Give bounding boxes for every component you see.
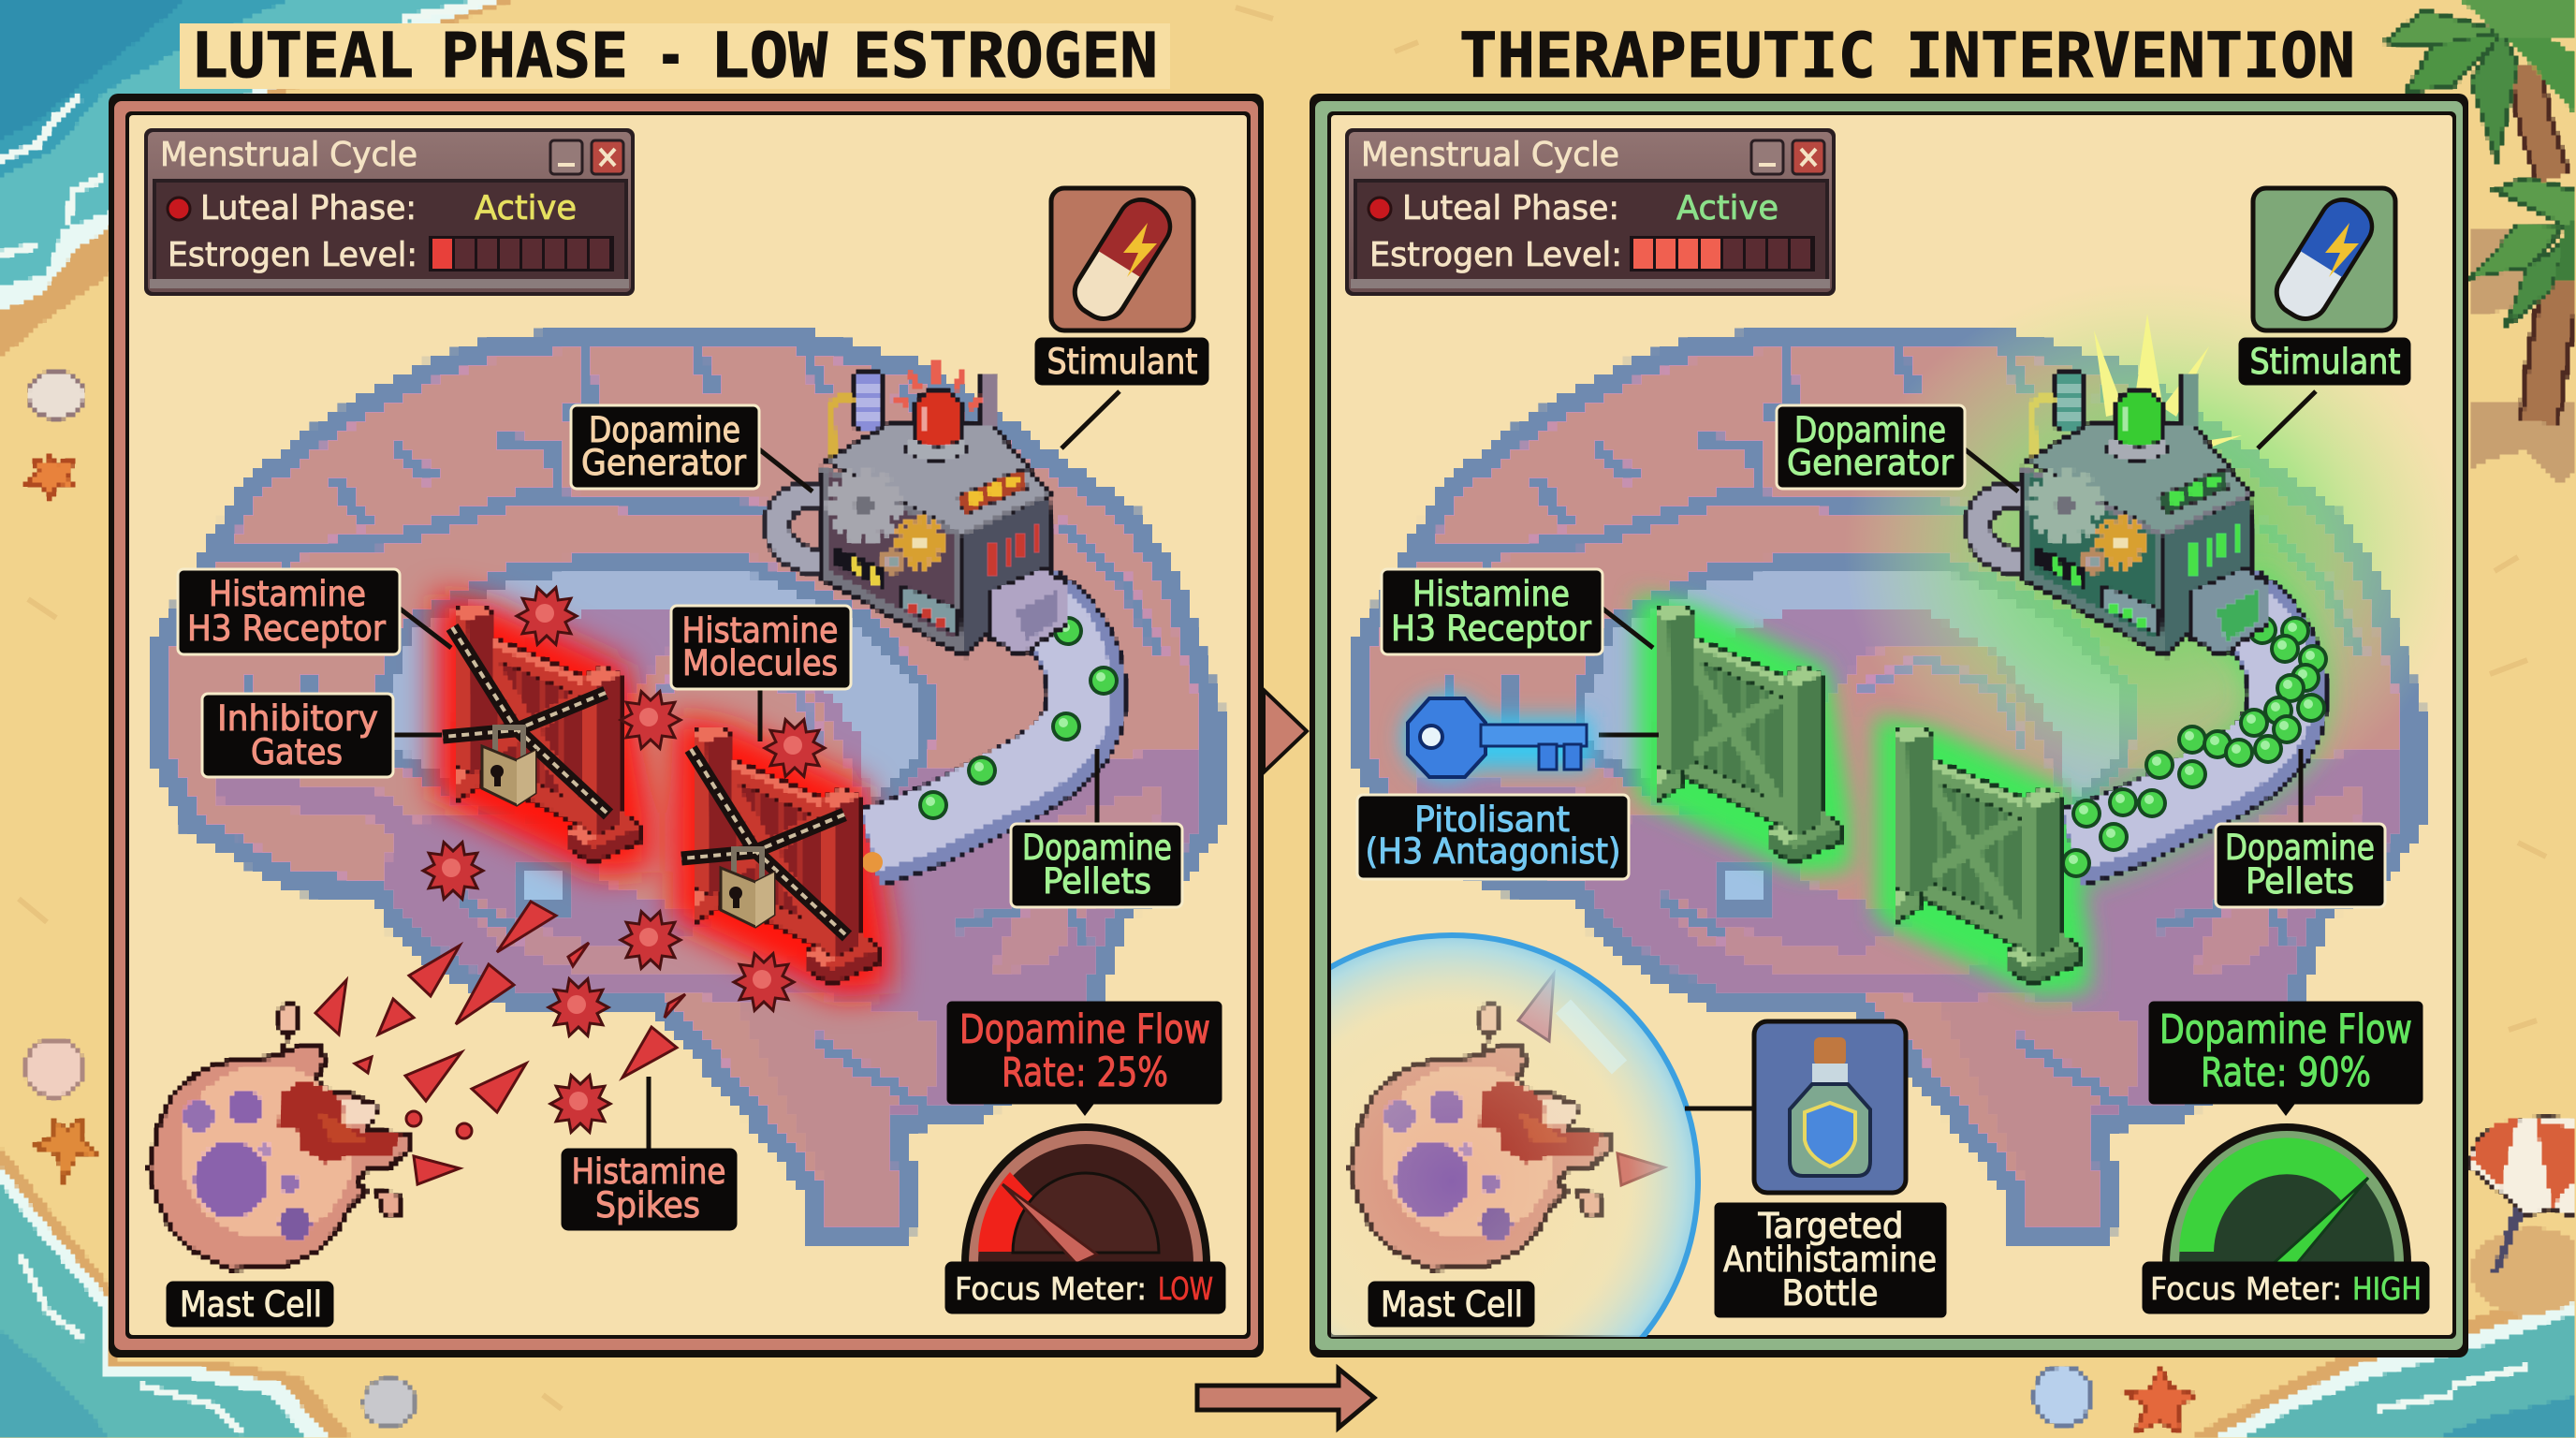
starfish xyxy=(34,1119,98,1180)
label: targeted antihistamine bottle: Bottle xyxy=(1782,1273,1878,1313)
label: histamine molecules: Histamine xyxy=(681,610,839,651)
title left: - xyxy=(656,20,685,92)
water: top left xyxy=(0,0,515,358)
menstrual cycle window xyxy=(1345,128,1836,296)
protective shield bubble xyxy=(1331,932,1701,1337)
seashell xyxy=(28,373,84,418)
title right: INTERVENTION xyxy=(1906,20,2355,92)
dopamine flow callout: Rate: 25% xyxy=(1002,1049,1168,1096)
icon: pitolisant key xyxy=(1403,695,1591,781)
mast cell xyxy=(1351,1005,1610,1269)
menstrual cycle window: Estrogen Level: xyxy=(168,236,417,274)
menstrual cycle window: Luteal Phase: xyxy=(200,189,417,227)
title left xyxy=(180,20,1170,92)
focus meter label: Focus Meter: xyxy=(955,1270,1147,1307)
palm tree xyxy=(2385,0,2576,484)
label: dopamine generator xyxy=(571,405,759,489)
water: bottom right xyxy=(2190,1283,2576,1438)
gate glow xyxy=(1641,599,2288,992)
label: histamine h3 receptor: Histamine xyxy=(1412,574,1570,614)
icon: stimulant capsule xyxy=(1051,188,1193,330)
dopamine flow callout: Dopamine Flow xyxy=(2159,1006,2412,1053)
icon: stimulant capsule xyxy=(2253,188,2395,330)
label: histamine h3 receptor: H3 Receptor xyxy=(187,609,387,649)
dopamine generator xyxy=(777,360,1067,655)
label: histamine h3 receptor: H3 Receptor xyxy=(1391,609,1592,649)
connector lines xyxy=(393,391,1120,1150)
menstrual cycle window: Menstrual Cycle xyxy=(160,136,417,174)
focus meter label xyxy=(2144,1263,2428,1313)
title right xyxy=(1459,20,2355,92)
open gate 2 xyxy=(1877,724,2079,984)
panel: luteal phase xyxy=(109,94,1264,1357)
dopamine pellets xyxy=(2061,604,2328,878)
rock xyxy=(364,1379,415,1426)
label: dopamine pellets xyxy=(2216,824,2385,907)
dopamine pellets xyxy=(862,616,1119,873)
label: dopamine generator xyxy=(1777,405,1965,489)
label: stimulant: Stimulant xyxy=(2250,342,2400,382)
arrow: panel connector xyxy=(1264,690,1307,772)
label: histamine spikes xyxy=(563,1150,736,1229)
dopamine generator xyxy=(1979,373,2268,655)
dopamine track xyxy=(2071,604,2288,847)
title right: THERAPEUTIC xyxy=(1459,20,1876,92)
label: pitolisant: Pitolisant xyxy=(1414,800,1570,840)
focus meter label: HIGH xyxy=(2352,1270,2422,1307)
label: dopamine generator: Dopamine xyxy=(1794,410,1946,450)
arrow: bottom progress xyxy=(1197,1369,1374,1428)
label: histamine h3 receptor xyxy=(178,569,400,654)
residual spikes xyxy=(1518,974,1664,1185)
title left: LOW xyxy=(710,20,827,92)
label: dopamine generator: Generator xyxy=(1787,443,1954,483)
starfish xyxy=(26,455,75,498)
starfish xyxy=(2127,1369,2194,1432)
label: pitolisant: (H3 Antagonist) xyxy=(1365,831,1621,872)
brain xyxy=(1360,338,2413,1233)
seashell xyxy=(26,1040,82,1096)
label: histamine molecules xyxy=(671,606,851,689)
dopamine flow callout: Rate: 90% xyxy=(2201,1049,2371,1096)
generator energy glow xyxy=(1863,307,2432,796)
title left: PHASE xyxy=(441,20,628,92)
label: inhibitory gates: Inhibitory xyxy=(217,698,378,739)
label: dopamine pellets: Dopamine xyxy=(2225,828,2375,868)
focus meter label: LOW xyxy=(1158,1270,1213,1307)
connector lines xyxy=(1599,391,2316,1108)
focus meter label: Focus Meter: xyxy=(2150,1270,2342,1307)
dopamine track xyxy=(871,604,1087,847)
histamine spikes xyxy=(315,902,685,1184)
label: histamine h3 receptor: Histamine xyxy=(209,574,366,614)
dopamine flow callout xyxy=(948,1003,1221,1116)
label: pitolisant xyxy=(1357,795,1629,879)
focus gauge xyxy=(961,1123,1210,1264)
menstrual cycle window xyxy=(144,128,635,296)
panel: therapeutic intervention xyxy=(1310,94,2468,1357)
label: histamine spikes: Histamine xyxy=(571,1152,726,1192)
inflammation glow xyxy=(440,599,885,992)
beach umbrella xyxy=(2468,1118,2576,1314)
open gate 1 xyxy=(1638,602,1840,862)
menstrual cycle window: Luteal Phase: xyxy=(1402,189,1619,227)
label: dopamine pellets: Pellets xyxy=(1043,861,1151,902)
label: dopamine generator: Dopamine xyxy=(589,410,740,450)
label: mast cell: Mast Cell xyxy=(180,1284,322,1325)
label: mast cell: Mast Cell xyxy=(1381,1284,1523,1325)
menstrual cycle window: Active xyxy=(475,189,577,227)
panel frame xyxy=(1310,94,2468,1357)
label: dopamine pellets xyxy=(1011,824,1182,907)
label: histamine h3 receptor xyxy=(1382,569,1603,654)
focus gauge xyxy=(2162,1123,2411,1266)
water: bottom left xyxy=(0,1147,351,1438)
label: histamine spikes: Spikes xyxy=(595,1185,700,1225)
title left: ESTROGEN xyxy=(853,20,1158,92)
menstrual cycle window: Menstrual Cycle xyxy=(1361,136,1619,174)
label: stimulant: Stimulant xyxy=(1046,342,1198,382)
locked gate 2 xyxy=(676,724,878,984)
menstrual cycle window: Active xyxy=(1676,189,1778,227)
mast cell xyxy=(150,1005,409,1269)
panel frame xyxy=(109,94,1264,1357)
seashell xyxy=(2035,1367,2091,1425)
label: dopamine pellets: Pellets xyxy=(2246,861,2354,902)
label: targeted antihistamine bottle: Targeted xyxy=(1758,1206,1904,1246)
label: histamine molecules: Molecules xyxy=(682,643,838,683)
label: targeted antihistamine bottle xyxy=(1716,1204,1945,1316)
dopamine flow callout xyxy=(2150,1003,2422,1116)
label: dopamine pellets: Dopamine xyxy=(1022,828,1172,868)
label: dopamine generator: Generator xyxy=(581,443,747,483)
icon: antihistamine bottle xyxy=(1754,1021,1906,1193)
label: inhibitory gates xyxy=(202,694,393,777)
histamine molecules xyxy=(423,588,825,1132)
focus meter label xyxy=(946,1263,1224,1313)
menstrual cycle window: Estrogen Level: xyxy=(1369,236,1622,274)
brain xyxy=(159,338,1212,1233)
title left: LUTEAL xyxy=(191,20,414,92)
label: inhibitory gates: Gates xyxy=(251,732,343,772)
locked gate 1 xyxy=(437,602,639,862)
label: targeted antihistamine bottle: Antihistamine xyxy=(1723,1240,1937,1280)
dopamine flow callout: Dopamine Flow xyxy=(959,1006,1210,1053)
